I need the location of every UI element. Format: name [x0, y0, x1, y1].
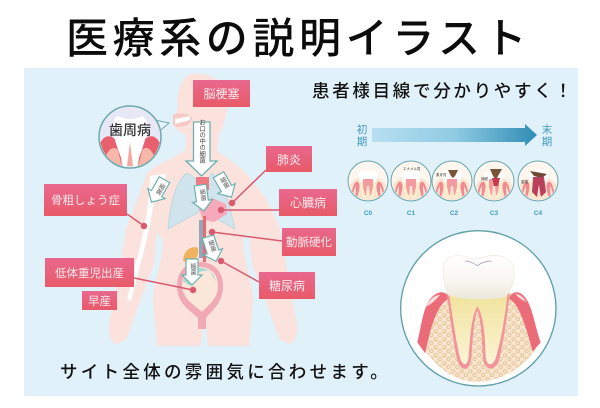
stage C1	[391, 161, 431, 217]
label: 肺炎: 肺炎	[277, 153, 301, 167]
arrow: abdomen small	[198, 234, 226, 264]
arrow: right small: 細菌	[218, 176, 231, 191]
label: 動脈硬化	[282, 228, 336, 256]
title: 医療系の説明イラスト	[66, 15, 531, 62]
stage C2: 象牙質	[436, 172, 447, 177]
artery	[201, 216, 204, 262]
label: 脳梗塞: 脳梗塞	[203, 86, 240, 101]
stage C0: C0	[364, 210, 373, 217]
heading: patient perspective: 患者様目線で分かりやすく！	[312, 81, 575, 101]
label: 動脈硬化: 動脈硬化	[286, 235, 332, 249]
large tooth illustration	[401, 231, 556, 386]
arrow: centre small	[190, 184, 214, 212]
heart	[198, 198, 227, 222]
label: 早産: 早産	[88, 294, 111, 308]
callout: periodontal disease	[99, 106, 169, 168]
progress arrow: 期	[357, 136, 367, 148]
callout: periodontal disease: 歯周病	[109, 122, 151, 138]
stage C0	[348, 161, 388, 217]
arrow: uterus small	[182, 259, 202, 285]
label: 糖尿病: 糖尿病	[269, 279, 305, 293]
arrow: abdomen small: 細菌	[206, 239, 217, 254]
progress arrow	[357, 123, 553, 148]
uterus	[177, 262, 223, 329]
arrow: uterus small: 細菌	[189, 262, 196, 276]
arrow: arm small: 細菌	[153, 181, 166, 197]
label: 心臓病: 心臓病	[290, 196, 326, 210]
progress arrow: 末	[542, 123, 553, 136]
stage C4: C4	[534, 210, 543, 217]
arrow: right small	[210, 170, 240, 202]
label: 糖尿病	[259, 272, 315, 299]
bone	[425, 293, 536, 382]
label: 早産	[82, 291, 117, 310]
progress arrow: 初	[357, 123, 367, 136]
caption: サイト全体の雰囲気に合わせます。	[60, 362, 391, 382]
stage C1: エナメル質	[403, 166, 421, 171]
label: 骨粗しょう症	[44, 184, 127, 216]
progress arrow: 期	[542, 136, 552, 148]
stage C3: 神経	[481, 176, 488, 181]
stage C3: C3	[490, 210, 499, 217]
crown	[443, 255, 514, 299]
arrow: mouth bacteria: お口の中の細菌	[198, 118, 205, 164]
label: 脳梗塞	[193, 80, 250, 107]
root	[447, 293, 510, 369]
trachea	[196, 177, 209, 190]
lungs	[168, 173, 235, 229]
label: 骨粗しょう症: 骨粗しょう症	[51, 194, 120, 207]
stage C2	[432, 161, 472, 217]
gums	[417, 292, 541, 353]
stage C3	[474, 161, 514, 217]
human body silhouette	[109, 74, 297, 346]
background panel	[24, 68, 578, 396]
connector lines	[127, 170, 282, 292]
arrow: mouth bacteria	[186, 118, 217, 176]
liver	[183, 247, 198, 262]
stage C4: 歯根	[521, 179, 528, 184]
mouth	[173, 114, 192, 127]
label: 低体重児出産	[45, 258, 134, 287]
stage C2: C2	[450, 210, 459, 217]
label: 肺炎	[266, 146, 312, 172]
stage C4	[518, 161, 558, 217]
label: 低体重児出産: 低体重児出産	[55, 266, 124, 280]
stage C1: C1	[407, 210, 416, 217]
arrow: arm small	[143, 175, 173, 207]
arrow: centre small: 細菌	[198, 188, 207, 203]
label: 心臓病	[279, 189, 337, 216]
